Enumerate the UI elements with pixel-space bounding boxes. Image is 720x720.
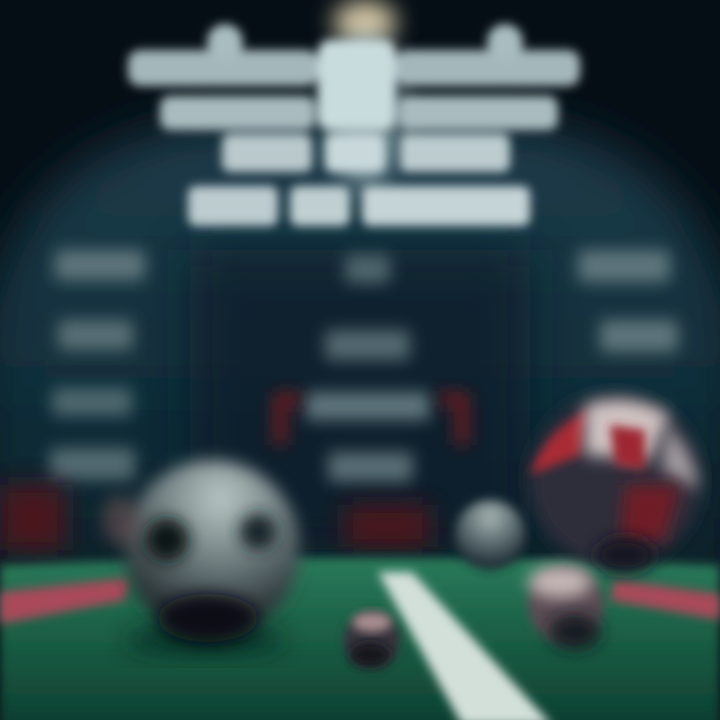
top light glow <box>327 0 403 190</box>
title block <box>128 24 580 226</box>
small grey ball <box>455 500 525 570</box>
centre column labels <box>305 255 430 482</box>
red goal posts <box>280 398 462 445</box>
right red and white ball <box>529 394 701 573</box>
white field line <box>378 572 552 720</box>
small red and white ball <box>528 566 604 650</box>
right column labels <box>578 250 678 352</box>
red background glow <box>0 485 430 550</box>
left football <box>102 460 300 654</box>
darker central panel <box>190 250 530 550</box>
tiny ball on field <box>344 612 400 668</box>
field <box>0 558 720 720</box>
stadium arch <box>0 125 720 590</box>
field red strips <box>0 578 720 624</box>
left column labels <box>50 250 145 480</box>
